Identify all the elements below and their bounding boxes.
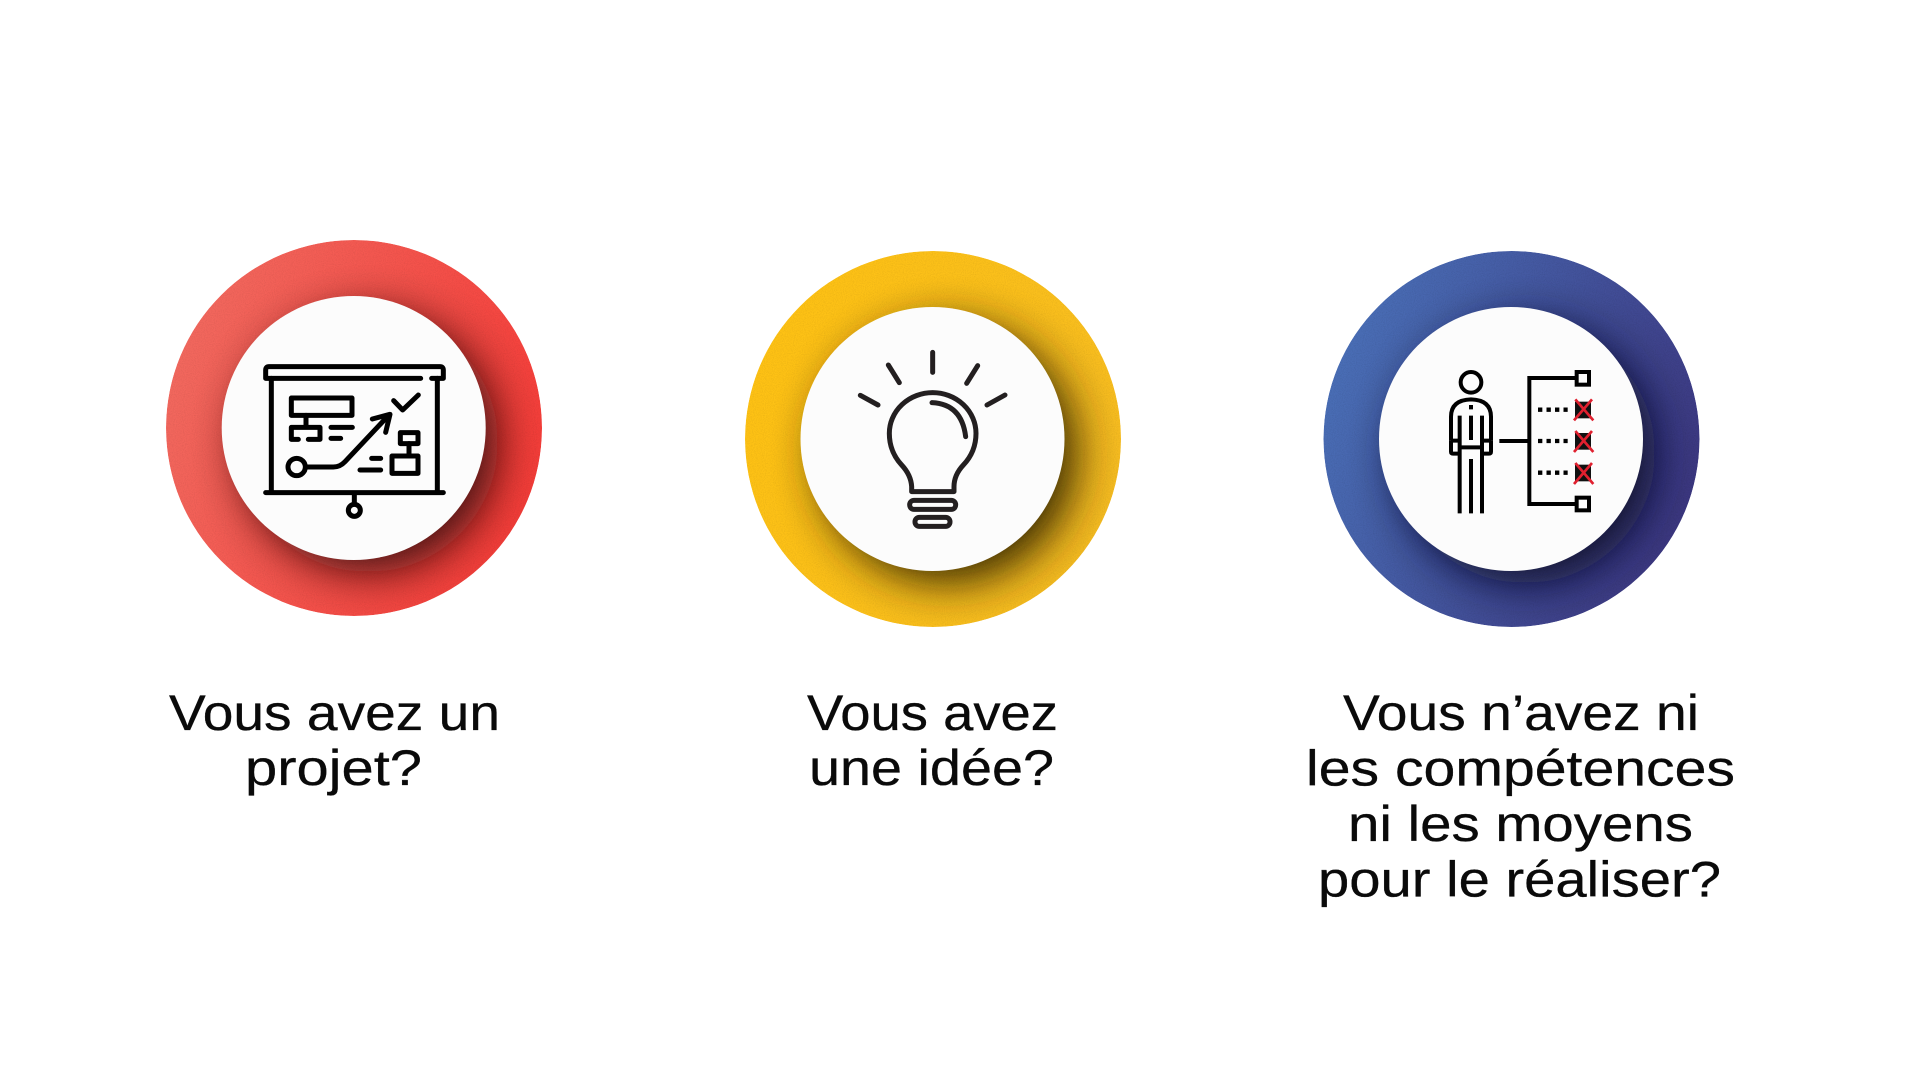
text block: skills question: pour le réaliser? — [1318, 852, 1721, 908]
text block: skills question: ni les moyens — [1348, 796, 1693, 852]
icon: light bulb — [860, 352, 1005, 526]
panel: project — [166, 240, 542, 616]
panel: idea — [745, 251, 1121, 627]
text block: idea question — [807, 685, 1058, 796]
red ring with drop shadow — [166, 240, 542, 616]
text block: skills question: les compétences — [1306, 740, 1735, 796]
white disc — [800, 307, 1064, 571]
yellow ring with drop shadow — [745, 251, 1121, 627]
text block: project question: Vous avez un — [169, 685, 500, 741]
text block: skills question: Vous n’avez ni — [1343, 685, 1699, 741]
red crosses — [1574, 399, 1593, 484]
icon: person with checklist — [1451, 372, 1593, 513]
panel: skills — [1323, 251, 1700, 627]
text block: idea question: Vous avez — [807, 685, 1058, 741]
icon: presentation board — [266, 367, 443, 516]
text block: project question — [169, 685, 500, 796]
text block: project question: projet? — [245, 740, 422, 796]
blue ring with drop shadow — [1323, 251, 1700, 627]
text block: skills question — [1306, 685, 1735, 908]
white disc — [1379, 307, 1643, 571]
text block: idea question: une idée? — [809, 740, 1054, 796]
white disc — [222, 296, 486, 560]
